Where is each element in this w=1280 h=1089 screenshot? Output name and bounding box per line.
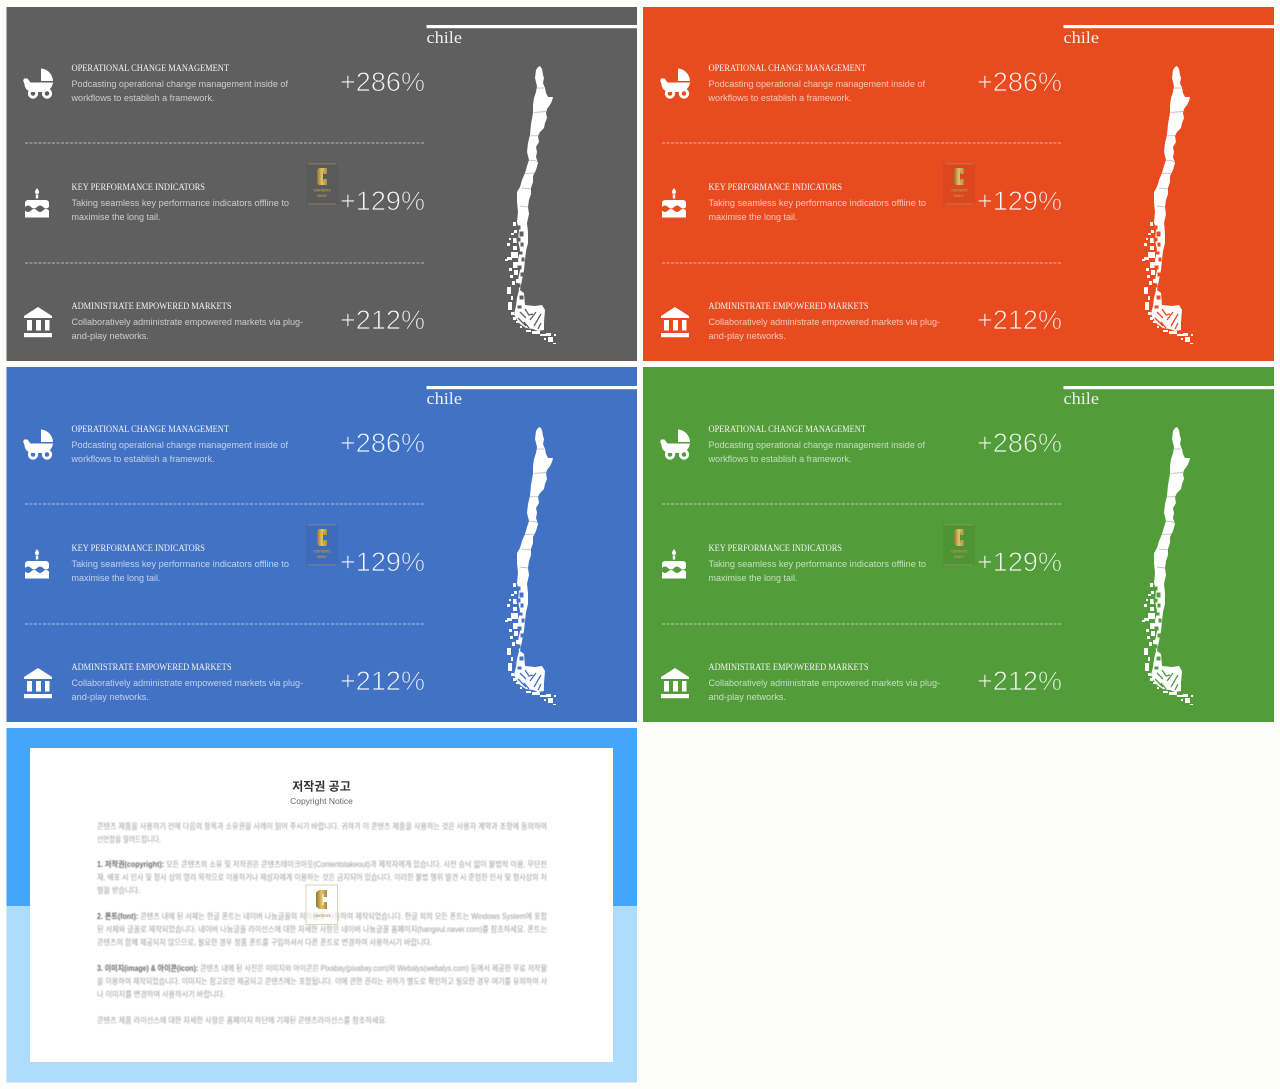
country label: chile [1064,28,1099,47]
metric row 3 text: Collaboratively administrate empowered markets via plug- [72,317,303,327]
country label [426,25,637,47]
notice body text [97,821,548,1025]
country label: chile [426,389,462,408]
metric row 3 text: Collaboratively administrate empowered markets via plug- [72,678,303,688]
metric row 3 text: and-play networks. [708,331,786,341]
notice body text: 선언함을 알려드립니다. [97,834,161,844]
notice body text: 을 이용하여 제작되었습니다. 이미지는 참고로만 제공되고 콘텐츠에는 포함됩니다. 이에 관한 권리는 귀하가 별도로 확인하고 필요한 경우 여기를 유의하여 사 [97,976,548,986]
icon: bank [24,307,52,337]
icon: cake [662,188,686,218]
value 129: +129% [977,186,1062,216]
watermark badge [306,164,338,204]
value 286: +286% [977,428,1062,458]
map of Chile [1142,66,1193,344]
metric row 3 text [708,302,940,341]
metric row 2 text [72,183,289,222]
metric row 2 text: KEY PERFORMANCE INDICATORS [708,544,842,554]
metric row 2 text [708,544,926,583]
map of Chile [505,427,556,705]
value 212: +212% [977,305,1062,335]
country label [1064,386,1274,408]
notice heading [290,778,353,806]
notice body text: 콘텐츠 제품을 사용하기 전에 다음의 항목과 소유권을 사례이 읽어 주시기 바랍니다. 귀하가 이 콘텐츠 제품을 사용하는 것은 사용자 계약과 조항에 동의하여 [97,821,547,831]
metric row 2 text: KEY PERFORMANCE INDICATORS [72,183,205,193]
metric row 2 text [72,544,289,583]
metric row 3 text: Collaboratively administrate empowered markets via plug- [708,317,940,327]
panel: orange Chile slide [643,7,1274,361]
panel: blue Chile slide [6,367,637,722]
value 212: +212% [340,305,425,335]
metric row 2 text: maximise the long tail. [708,212,798,222]
metric row 2 text: Taking seamless key performance indicators offline to [72,198,289,208]
metric row 2 text: maximise the long tail. [72,212,160,222]
metric row 1 text [70,64,288,103]
metric row 1 text: OPERATIONAL CHANGE MANAGEMENT [708,64,866,74]
metric row 3 text: and-play networks. [72,692,149,702]
metric row 3 text [72,663,303,702]
icon: cake [662,549,686,578]
panel: gray Chile slide [6,7,637,361]
icon: pram [660,430,690,458]
value 129: +129% [977,547,1062,577]
metric row 1 text [707,64,925,103]
metric row 3 text: ADMINISTRATE EMPOWERED MARKETS [72,302,232,312]
metric row 3 text: ADMINISTRATE EMPOWERED MARKETS [708,302,868,312]
metric row 2 text: KEY PERFORMANCE INDICATORS [72,544,205,554]
notice heading: Copyright Notice [290,796,353,806]
metric row 1 text: Podcasting operational change management inside of [72,79,288,89]
metric row 2 text: Taking seamless key performance indicators offline to [72,559,289,569]
metric row 2 text: Taking seamless key performance indicators offline to [708,198,926,208]
metric row 2 text [708,183,926,222]
icon: bank [24,668,52,698]
icon: cake [25,549,49,578]
metric row 1 text: Podcasting operational change management inside of [72,440,288,450]
icon: pram [23,68,53,97]
metric row 3 text: ADMINISTRATE EMPOWERED MARKETS [72,663,232,673]
icon: pram [660,68,690,97]
watermark badge: CONTENTS [314,913,331,918]
metric row 1 text: OPERATIONAL CHANGE MANAGEMENT [72,64,229,74]
metric row 3 text [708,663,940,702]
notice body text: 콘텐츠의 함께 제공되지 않으므로, 필요한 경우 정품 폰트를 구입하셔서 다른 폰트로 변경하여 사용하시기 바랍니다. [97,937,432,947]
icon: pram [23,430,53,458]
notice body text: 콘텐츠 제품 라이선스에 대한 자세한 사항은 홈페이지 하단에 기재된 콘텐츠라이선스를 참조하세요. [97,1015,387,1025]
watermark badge [943,164,975,204]
metric row 1 text [70,425,288,464]
notice body text: 1. 저작권(copyright): 모든 콘텐츠의 소유 및 저작권은 콘텐츠테이크아웃(Contentstakeout)과 제작자에게 있습니다. 사전 승낙 없이 불법적 이용, 무단전 [97,859,547,869]
icon: cake [25,188,49,218]
metric row 1 text: Podcasting operational change management inside of [708,440,925,450]
metric row 3 text [72,302,303,341]
value 286: +286% [340,428,425,458]
watermark badge [306,885,338,924]
metric row 2 text: maximise the long tail. [72,573,160,583]
notice body text: 2. 폰트(font): 콘텐츠 내에 된 서체는 한글 폰트는 네이버 나눔글꼴의 저작물로 사용하여 제작되었습니다. 한글 외의 모든 폰트는 Windows System에 포함 [97,911,548,921]
metric row 3 text: and-play networks. [72,331,149,341]
map of Chile [1142,427,1193,705]
metric row 2 text: KEY PERFORMANCE INDICATORS [708,183,842,193]
notice body text: 된 서체와 글꼴로 제작되었습니다. 네이버 나눔글꼴 라이선스에 대한 자세한 사항은 네이버 나눔글꼴 홈페이지(hangeul.naver.com)를 참조하세요. 폰트는 [97,924,547,934]
metric row 3 text: ADMINISTRATE EMPOWERED MARKETS [708,663,868,673]
metric row 1 text: Podcasting operational change management inside of [708,79,925,89]
value 129: +129% [340,547,425,577]
value 212: +212% [340,666,425,696]
notice heading: 저작권 공고 [292,778,351,794]
metric row 1 text [707,425,925,464]
metric row 2 text: maximise the long tail. [708,573,798,583]
metric row 1 text: workflows to establish a framework. [707,93,851,103]
panel: copyright notice [6,728,637,1082]
metric row 1 text: OPERATIONAL CHANGE MANAGEMENT [72,425,229,435]
country label: chile [426,28,462,47]
panel: green Chile slide [643,367,1274,722]
notice body text: 나 이미지를 변경하여 사용하시기 바랍니다. [97,989,225,999]
watermark badge [306,524,338,566]
metric row 1 text: OPERATIONAL CHANGE MANAGEMENT [708,425,866,435]
watermark badge [943,524,975,566]
metric row 3 text: and-play networks. [708,692,786,702]
icon: bank [661,668,689,698]
metric row 1 text: workflows to establish a framework. [70,454,214,464]
notice body text: 3. 이미지(image) & 아이콘(icon): 콘텐츠 내에 된 사진은 이미지와 아이콘은 Pixabay(pixabay.com)와 Webalys(webalys.com) 등에서 제공한 무료 저작물 [97,963,547,973]
value 286: +286% [340,67,425,97]
country label: chile [1064,389,1099,408]
value 286: +286% [977,67,1062,97]
metric row 3 text: Collaboratively administrate empowered markets via plug- [708,678,940,688]
map of Chile [505,66,556,344]
metric row 2 text: Taking seamless key performance indicators offline to [708,559,926,569]
icon: bank [661,307,689,337]
notice body text: 재, 배포 시 민사 및 형사 상의 영리 목적으로 이용하거나 제삼자에게 이용하는 것은 금지되어 있습니다. 이러한 불법 행위 발견 시 준엄한 민사 및 형사상의 처 [97,872,547,882]
metric row 1 text: workflows to establish a framework. [70,93,214,103]
country label [1064,25,1274,47]
notice body text: 벌을 받습니다. [97,885,140,895]
metric row 1 text: workflows to establish a framework. [707,454,851,464]
value 129: +129% [340,186,425,216]
country label [426,386,637,408]
value 212: +212% [977,666,1062,696]
